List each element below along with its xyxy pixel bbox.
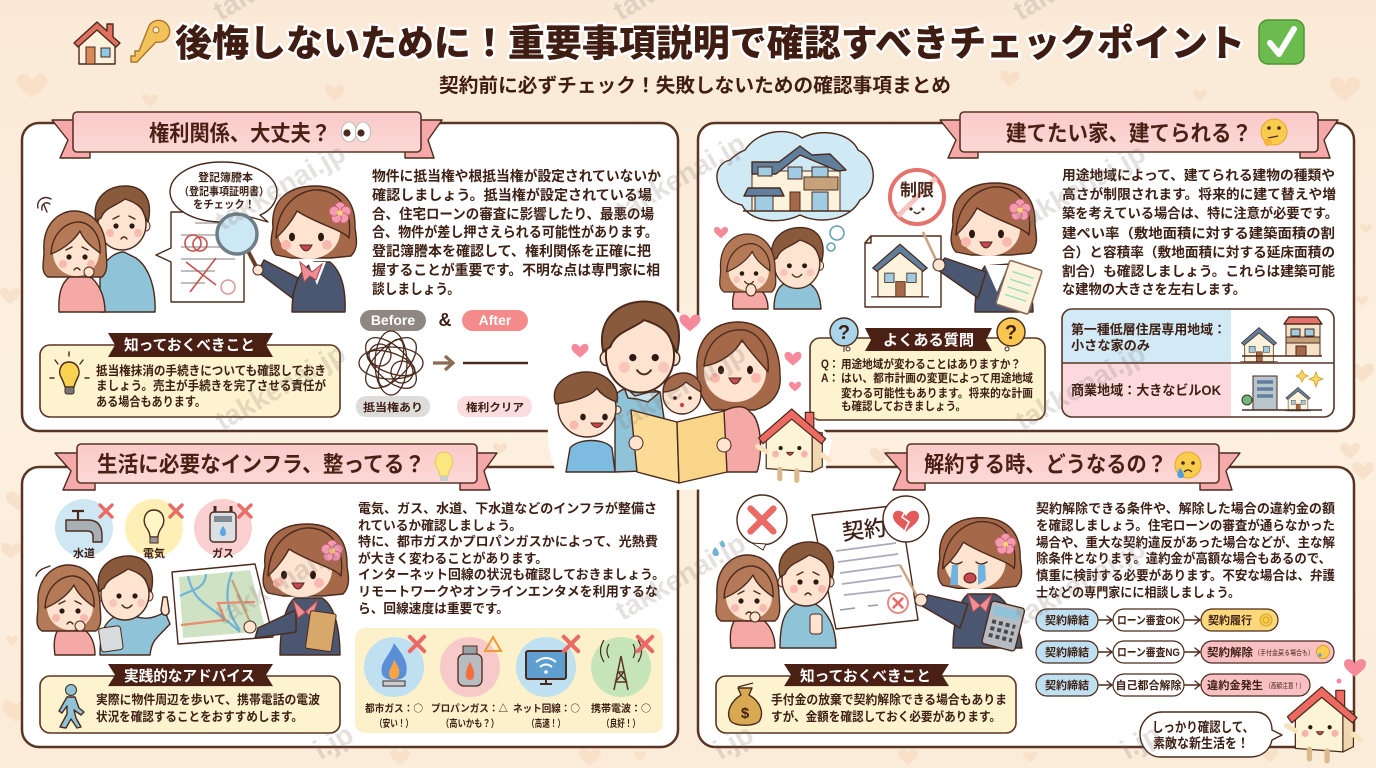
watermarks: i.jp — [308, 718, 359, 765]
propane gas — [431, 637, 508, 730]
flow chart: cancellation — [1036, 609, 1334, 696]
flow row 2: （手付金戻る場合も） — [1254, 648, 1314, 657]
icon: small houses — [1240, 317, 1322, 362]
city gas: 都市ガス：○ — [365, 700, 423, 715]
agent — [258, 186, 356, 312]
icon: key — [131, 20, 170, 62]
boy — [554, 372, 621, 472]
zoning table: 第一種低層住居専用地域： — [1071, 322, 1226, 337]
watermarks: i.jp — [708, 718, 759, 765]
callout: 実践的なアドバイス: 実践的なアドバイス — [124, 667, 255, 685]
heading: 後悔しないために！重要事項説明で確認すべきチェックポイント — [175, 23, 1245, 64]
baby — [663, 373, 701, 414]
ribbon heading — [52, 112, 442, 158]
callout: 知っておくべきこと: 知っておくべきこと — [124, 336, 255, 354]
magnifier — [217, 214, 263, 275]
before pill: Before — [371, 312, 415, 328]
contract document: 契約 — [841, 515, 887, 545]
ribbon heading: 生活に必要なインフラ、整ってる？ — [97, 452, 425, 477]
flow row 3: 自己都合解除 — [1116, 678, 1182, 692]
callout: 知っておくべきこと: ましょう。売主が手続きを完了させる責任が — [96, 378, 326, 393]
city gas — [364, 637, 424, 730]
icon: water: 水道 — [73, 546, 95, 560]
flow row 2 — [1036, 641, 1334, 663]
flow row 2: 契約解除 — [1207, 645, 1253, 659]
flow row 1: ローン審査OK — [1117, 613, 1180, 627]
callout: 実践的なアドバイス: 状況を確認することをおすすめします。 — [96, 709, 303, 724]
body text: 除条件となります。違約金が高額な場合もあるので、 — [1036, 551, 1331, 566]
title — [74, 20, 1304, 64]
label: 権利クリア — [457, 396, 532, 417]
mother — [697, 322, 780, 472]
agent — [232, 524, 348, 655]
couple — [714, 227, 824, 309]
illustration: dream house thought bubble — [717, 132, 873, 221]
mobile signal: 携帯電波：○ — [591, 700, 651, 715]
body text: 電気、ガス、水道、下水道などのインフラが整備さ — [358, 501, 657, 516]
body text: 築を考えている場合は、特に注意が必要です。 — [1062, 205, 1338, 221]
internet: （高速！） — [527, 715, 565, 730]
icon: building and house — [1242, 370, 1323, 411]
ribbon heading: 権利関係、大丈夫？ — [149, 121, 331, 146]
icon: water — [55, 499, 113, 560]
icon: house — [74, 22, 120, 64]
mobile signal — [591, 637, 652, 730]
after pill — [462, 310, 528, 331]
body text: な建物の大きさを左右します。 — [1062, 281, 1246, 297]
before and after diagram: & — [438, 310, 452, 330]
body text: 場合や、重大な契約違反があった場合などが、主な解 — [1036, 535, 1335, 550]
body text: 合、物件が差し押さえられる可能性があります。 — [372, 224, 658, 240]
agent crying — [900, 518, 1025, 651]
house card — [865, 236, 941, 307]
before and after diagram — [356, 310, 532, 417]
callout: 実践的なアドバイス: 実際に物件周辺を歩いて、携帯電話の電波 — [96, 692, 320, 707]
mascot: house — [1287, 659, 1366, 761]
arrow — [433, 356, 453, 370]
callout: FAQ: はい、都市計画の変更によって用途地域 — [841, 371, 1033, 385]
panel: 建てたい家 — [698, 112, 1354, 431]
watermarks: takkenai.jp — [210, 337, 351, 436]
body text: リモートワークやオンラインエンタメを利用するな — [358, 584, 658, 599]
body text: ら、回線速度は重要です。 — [358, 601, 509, 616]
callout: 知っておくべきこと: ある場合もあります。 — [96, 394, 206, 409]
speech bubble: cross — [737, 495, 787, 550]
propane gas: プロパンガス：△ — [431, 700, 508, 715]
clipboard — [996, 260, 1042, 314]
internet: ネット回線：○ — [513, 700, 580, 715]
speech bubble: closing message: 素敵な新生活を！ — [1153, 735, 1249, 751]
ribbon heading: 解約する時、どうなるの？ — [924, 452, 1167, 477]
callout: FAQ — [810, 318, 1045, 420]
callout: FAQ: も確認しておきましょう。 — [841, 399, 966, 413]
flow row 3: 違約金発生 — [1207, 678, 1263, 692]
body text — [1062, 167, 1338, 297]
body text: インターネット回線の状況も確認しておきましょう。 — [358, 567, 665, 582]
illustration: family reading — [548, 298, 832, 490]
callout: FAQ: A： — [821, 373, 839, 385]
body text: が大きく変わることがあります。 — [358, 551, 548, 566]
callout: FAQ: よくある質問 — [883, 332, 974, 349]
speech bubble: closing message — [1140, 712, 1282, 757]
body text: を確認しましょう。住宅ローンの審査が通らなかった — [1036, 518, 1335, 533]
watermarks: takkenai.jp — [1010, 532, 1151, 631]
callout: 知っておくべきこと: 抵当権抹消の手続きについても確認しておき — [96, 363, 326, 378]
body text: 談しましょう。 — [372, 281, 460, 297]
subtitle: 契約前に必ずチェック！失敗しないための確認事項まとめ — [439, 75, 951, 97]
watermarks: takkenai.jp — [210, 137, 351, 236]
flow row 3: （高額注意！） — [1265, 681, 1305, 690]
map — [172, 564, 273, 644]
label: 抵当権あり — [356, 396, 430, 417]
body text: 握することが重要です。不明な点は専門家に相 — [372, 262, 660, 278]
after pill: After — [479, 312, 512, 328]
speech bubble: （登記事項証明書） — [179, 184, 269, 198]
label: 抵当権あり: 抵当権あり — [363, 400, 423, 414]
speech bubble: broken heart — [883, 496, 929, 542]
body text: 確認しましょう。抵当権が設定されている場 — [372, 187, 652, 203]
body text: 用途地域によって、建てられる建物の種類や — [1062, 167, 1335, 183]
icon: money bag: $ — [741, 705, 750, 722]
watermarks: i.jp — [1115, 718, 1166, 765]
panel: インフラ — [22, 444, 678, 747]
flow row 1: 契約締結 — [1045, 613, 1089, 627]
contract document — [812, 505, 918, 629]
panel: 解約 — [698, 444, 1354, 747]
icon: gas — [194, 499, 252, 560]
icon: electricity — [125, 499, 183, 560]
icon: question marks — [830, 318, 1025, 352]
flow row 3 — [1036, 674, 1310, 696]
mascot: house — [758, 409, 829, 480]
speech bubble: をチェック！ — [193, 198, 255, 211]
callout: 知っておくべきこと — [40, 333, 340, 417]
icon: restriction sign: 制限 — [900, 181, 934, 200]
callout: FAQ: Q： — [821, 359, 839, 371]
internet — [513, 637, 580, 730]
zoning table: 商業地域：大きなビルOK — [1071, 382, 1221, 398]
speech bubble: 登記簿謄本 — [198, 170, 253, 184]
icon: money bag — [729, 683, 762, 725]
document — [156, 212, 244, 302]
body text: れているか確認しましょう。 — [358, 518, 522, 533]
callout: 知っておくべきこと: すが、金額を確認しておく必要があります。 — [771, 709, 1001, 724]
zoning table: 小さな家のみ — [1071, 338, 1150, 353]
icon: gas: ガス — [212, 546, 234, 560]
body text: 合、住宅ローンの審査に影響したり、最悪の場 — [372, 206, 654, 222]
watermarks: takkenai.jp — [610, 527, 751, 626]
body text: 建ぺい率（敷地面積に対する建築面積の割 — [1062, 225, 1335, 241]
callout: 知っておくべきこと: 知っておくべきこと — [800, 667, 931, 685]
flow row 1 — [1036, 609, 1278, 631]
flow row 2: ローン審査NG — [1117, 645, 1180, 659]
watermarks: takkenai.jp — [210, 532, 351, 631]
icon: walking person — [59, 684, 84, 728]
body text — [372, 168, 661, 297]
icon: question marks: ? — [1005, 322, 1017, 344]
icon: restriction sign — [890, 170, 944, 224]
illustration: couple and agent checking register — [38, 162, 356, 312]
body text: 契約解除できる条件や、解除した場合の違約金の額 — [1036, 501, 1335, 516]
hearts — [572, 315, 802, 391]
callout: 知っておくべきこと — [716, 664, 1016, 733]
mobile signal: （良好！） — [602, 715, 640, 730]
watermarks — [208, 0, 1166, 765]
couple — [712, 540, 836, 648]
husband — [94, 186, 155, 312]
watermarks: takkenai.jp — [610, 127, 751, 226]
label: 権利クリア: 権利クリア — [466, 400, 524, 414]
agent — [923, 183, 1042, 314]
callout: 知っておくべきこと: 手付金の放棄で契約解除できる場合もありま — [771, 692, 1007, 707]
ribbon heading — [940, 112, 1338, 158]
icon: electricity: 電気 — [143, 546, 165, 560]
calculator — [981, 601, 1025, 651]
ribbon heading: 建てたい家、建てられる？ — [1006, 121, 1252, 146]
couple — [36, 556, 170, 655]
speech bubble — [170, 162, 277, 222]
panel: 権利関係 — [22, 112, 678, 431]
body text: 慎重に検討する必要があります。不安な場合は、弁護 — [1036, 568, 1335, 583]
ribbon heading — [885, 444, 1240, 490]
tangled line — [357, 329, 425, 397]
body text: 割合）も確認しましょう。これらは建築可能 — [1062, 263, 1335, 279]
watermarks: takkenai.jp — [1010, 337, 1151, 436]
body text: 物件に抵当権や根抵当権が設定されていないか — [372, 168, 661, 184]
flow row 1: 契約履行 — [1208, 613, 1252, 627]
body text — [1036, 501, 1335, 600]
watermarks: takkenai.jp — [610, 337, 751, 436]
city gas: （安い！） — [375, 715, 413, 730]
zoning table — [1062, 309, 1334, 417]
speech bubble: closing message: しっかり確認して、 — [1152, 720, 1254, 735]
before pill — [360, 310, 426, 331]
icon: question marks: ? — [838, 322, 850, 344]
open book — [629, 410, 731, 483]
wife — [43, 211, 107, 312]
comparison: energy and network — [355, 628, 663, 733]
flow row 3: 契約締結 — [1045, 678, 1089, 692]
flow row 2: 契約締結 — [1045, 645, 1089, 659]
body text — [358, 501, 665, 616]
callout: FAQ: 変わる可能性もあります。将来的な計画 — [841, 386, 1033, 400]
icon row: utilities — [55, 499, 252, 560]
ribbon heading — [55, 444, 497, 490]
propane gas: （高いかも？） — [441, 715, 499, 730]
callout: FAQ: 用途地域が変わることはありますか？ — [841, 357, 1021, 371]
body text: 特に、都市ガスかプロパンガスかによって、光熱費 — [358, 534, 658, 549]
father — [600, 301, 680, 472]
icon: light bulb — [50, 352, 89, 394]
watermarks: takkenai.jp — [1010, 137, 1151, 236]
body text: 登記簿謄本を確認して、権利関係を正確に把 — [372, 243, 651, 259]
body text: 高さが制限されます。将来的に建て替えや増 — [1062, 186, 1336, 202]
body text: 士などの専門家にに相談しましょう。 — [1036, 585, 1240, 600]
icon: check — [1259, 20, 1304, 64]
callout: 実践的なアドバイス — [40, 664, 340, 733]
body text: 合）と容積率（敷地面積に対する延床面積の — [1062, 244, 1335, 260]
